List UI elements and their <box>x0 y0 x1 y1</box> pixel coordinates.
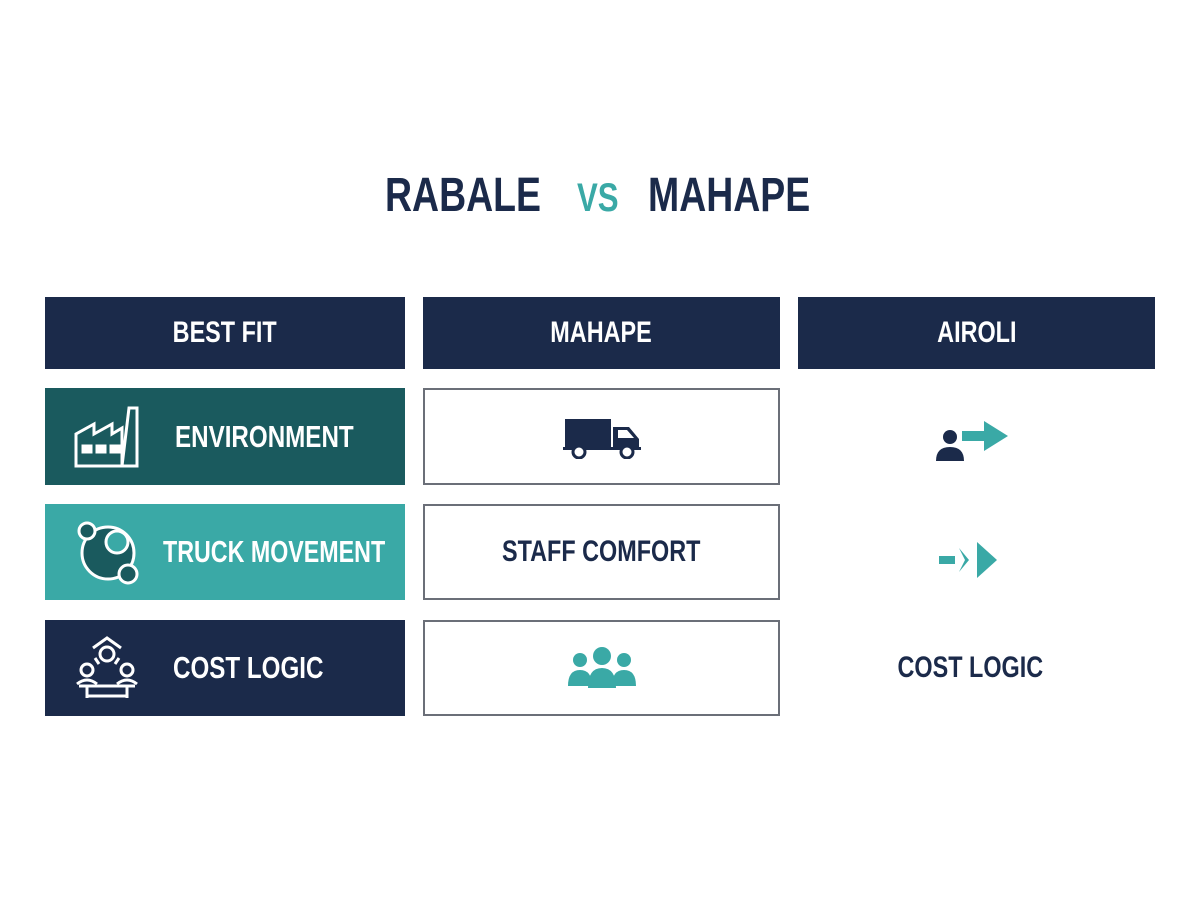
row: truck movement: TRUCK MOVEMENT <box>163 534 385 569</box>
cell: staff comfort <box>423 504 780 600</box>
row: cost logic: COST LOGIC <box>173 650 323 685</box>
header: airoli <box>798 297 1155 369</box>
title: RABALE <box>385 168 541 222</box>
row: environment: ENVIRONMENT <box>175 418 354 454</box>
icon: person arrow <box>936 421 1008 461</box>
cell: mahape people <box>423 620 780 716</box>
header: best fit: BEST FIT <box>173 316 277 349</box>
icon: factory <box>74 406 138 468</box>
header: mahape <box>423 297 780 369</box>
icon: truck <box>563 419 641 459</box>
header: airoli: AIROLI <box>937 316 1016 349</box>
icon: arrow <box>939 542 997 578</box>
text: cost logic airoli: COST LOGIC <box>897 651 1043 684</box>
icon: meeting <box>76 636 138 698</box>
cell: mahape truck <box>423 388 780 485</box>
row: cost logic <box>45 620 405 716</box>
icon: globe <box>78 522 138 584</box>
icon: people <box>568 647 636 688</box>
cell: staff comfort: STAFF COMFORT <box>502 535 701 568</box>
title: MAHAPE <box>648 168 810 222</box>
header: best fit <box>45 297 405 369</box>
title: VS <box>577 176 619 220</box>
row: environment <box>45 388 405 485</box>
header: mahape: MAHAPE <box>551 316 652 349</box>
row: truck movement <box>45 504 405 600</box>
title <box>385 168 810 222</box>
